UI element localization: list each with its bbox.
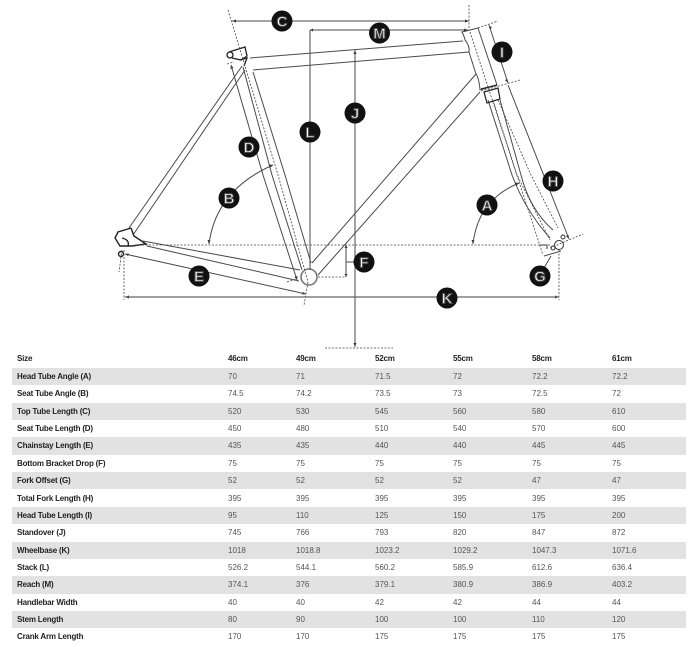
row: head tube length [12, 507, 686, 524]
row: reach [12, 576, 686, 594]
row: handlebar width: 40 [296, 598, 305, 607]
row: standover: 745 [228, 528, 241, 537]
fork dropout [540, 235, 565, 250]
row: top tube length: Top Tube Length (C) [17, 407, 90, 416]
dimension D: D [244, 140, 255, 156]
row: chainstay length: 435 [228, 441, 241, 450]
row: stem length: 90 [296, 615, 305, 624]
row: stack: 585.9 [453, 563, 473, 572]
row: fork offset [12, 472, 686, 489]
row: wheelbase: 1018.8 [296, 546, 320, 554]
rear dropout [115, 228, 146, 256]
dimension H [508, 85, 569, 239]
row: wheelbase: 1029.2 [453, 546, 477, 554]
row: seat tube angle: 72.5 [532, 389, 548, 398]
row: head tube length: 175 [532, 511, 545, 520]
dimension F: F [359, 254, 369, 272]
row: total fork length: 395 [228, 494, 241, 502]
row: reach: 379.1 [375, 580, 395, 589]
row: stack: 544.1 [296, 563, 316, 572]
row: wheelbase: Wheelbase (K) [17, 546, 70, 554]
row: handlebar width: 44 [612, 598, 621, 607]
table header: 46cm [228, 354, 248, 363]
dimension M [310, 22, 468, 44]
row: seat tube length [17, 424, 625, 433]
row: chainstay length: 445 [532, 441, 545, 450]
row: total fork length: 395 [375, 494, 388, 502]
row: chainstay length: 445 [612, 441, 625, 450]
row: stack: 636.4 [612, 563, 632, 572]
angle A: A [482, 198, 493, 214]
row: wheelbase: 1023.2 [375, 546, 399, 554]
row: seat tube angle: 73 [453, 389, 462, 398]
row: seat tube length: 540 [453, 424, 466, 433]
table header: 49cm [296, 354, 316, 363]
row: seat tube length: 570 [532, 424, 545, 433]
row: top tube length: 560 [453, 407, 466, 416]
seat clamp [227, 47, 247, 66]
row: reach: Reach (M) [17, 580, 53, 589]
row: stem length: 80 [228, 615, 237, 624]
row: bottom bracket drop: 75 [228, 459, 237, 468]
row: bottom bracket drop: 75 [296, 459, 305, 468]
row: handlebar width: 44 [532, 598, 541, 607]
row: bottom bracket drop [17, 459, 621, 468]
row: standover [17, 528, 625, 537]
row: seat tube length: 480 [296, 424, 309, 433]
row: top tube length: 580 [532, 407, 545, 416]
row: handlebar width: 42 [375, 598, 384, 607]
row: seat tube angle: Seat Tube Angle (B) [17, 389, 88, 398]
row: chainstay length: 435 [296, 441, 309, 450]
row: crank arm length [17, 632, 625, 641]
row: top tube length: 530 [296, 407, 309, 416]
head tube [462, 28, 497, 90]
row: head tube length: 110 [296, 511, 309, 520]
fork [481, 85, 553, 238]
row: head tube length: 95 [228, 511, 237, 520]
row: seat tube length: 600 [612, 424, 625, 433]
row: fork offset: 52 [296, 476, 305, 485]
row: total fork length: 395 [453, 494, 466, 502]
row: bottom bracket drop: 75 [612, 459, 621, 468]
row: reach: 374.1 [228, 580, 248, 589]
row: wheelbase: 1018 [228, 546, 246, 554]
row: standover: 766 [296, 528, 309, 537]
row: chainstay length: 440 [375, 441, 388, 450]
geometry table [12, 354, 686, 641]
row: bottom bracket drop: 75 [532, 459, 541, 468]
row: seat tube angle [17, 389, 621, 398]
table header: Size [17, 354, 32, 363]
row: head tube angle: Head Tube Angle (A) [17, 372, 91, 381]
row: bottom bracket drop: 75 [453, 459, 462, 468]
row: crank arm length: 175 [375, 632, 388, 641]
row: seat tube angle: 73.5 [375, 389, 391, 398]
row: handlebar width: Handlebar Width [17, 598, 78, 607]
dimension E [125, 254, 306, 294]
row: seat tube length: 450 [228, 424, 241, 433]
row: chainstay length: Chainstay Length (E) [17, 441, 93, 450]
dimension C: C [277, 14, 288, 30]
row: head tube angle: 72.2 [532, 372, 548, 381]
chainstay [143, 241, 300, 281]
table header: 61cm [612, 354, 632, 363]
row: fork offset: 52 [228, 476, 237, 485]
row: seat tube length: 510 [375, 424, 388, 433]
row: handlebar width: 40 [228, 598, 237, 607]
seat stay [129, 66, 245, 235]
row: standover: 820 [453, 528, 466, 537]
row: seat tube angle: 74.5 [228, 389, 244, 398]
row: stem length [12, 611, 686, 628]
dimension F [346, 245, 374, 277]
dimension I: I [500, 44, 504, 62]
arrowheads [125, 20, 569, 347]
row: head tube angle: 70 [228, 372, 237, 381]
dimension K: K [442, 290, 453, 308]
row: standover: 872 [612, 528, 625, 537]
row: fork offset: 47 [612, 476, 621, 485]
row: stack: 526.2 [228, 563, 248, 572]
top tube [250, 41, 469, 70]
row: chainstay length: 440 [453, 441, 466, 450]
dimension E: E [194, 268, 204, 286]
row: reach: 376 [296, 580, 309, 589]
row: fork offset: Fork Offset (G) [17, 476, 70, 485]
row: top tube length: 545 [375, 407, 388, 416]
row: standover: 793 [375, 528, 388, 537]
row: head tube length: 125 [375, 511, 388, 520]
row: head tube angle: 72.2 [612, 372, 628, 381]
row: fork offset: 52 [375, 476, 384, 485]
row: stem length: 100 [375, 615, 388, 624]
row: crank arm length: 170 [228, 632, 241, 641]
row: stem length: 120 [612, 615, 625, 624]
row: total fork length: 395 [612, 494, 625, 502]
row: top tube length [12, 403, 686, 420]
row: seat tube length: Seat Tube Length (D) [17, 424, 93, 433]
row: handlebar width [17, 598, 621, 607]
row: crank arm length: 175 [453, 632, 466, 641]
row: stack: 560.2 [375, 563, 395, 572]
table header: 58cm [532, 354, 552, 363]
row: head tube angle [12, 368, 686, 385]
row: head tube angle: 71.5 [375, 372, 391, 381]
dimension L [300, 30, 320, 270]
down tube [312, 74, 480, 275]
row: head tube angle: 72 [453, 372, 462, 381]
dimension K [125, 288, 559, 308]
dimension G [530, 251, 561, 286]
dimension H: H [548, 174, 558, 190]
dimension L: L [305, 124, 315, 142]
row: head tube angle: 71 [296, 372, 305, 381]
row: standover: Standover (J) [17, 528, 66, 537]
row: reach: 380.9 [453, 580, 473, 589]
row: seat tube angle: 72 [612, 389, 621, 398]
dashed reference lines [119, 5, 583, 348]
angle B: B [224, 190, 235, 208]
row: stem length: 110 [532, 615, 545, 624]
row: total fork length: 395 [532, 494, 545, 502]
row: standover: 847 [532, 528, 545, 537]
row: crank arm length: Crank Arm Length [17, 632, 83, 641]
row: stack: 612.6 [532, 563, 552, 572]
row: crank arm length: 175 [532, 632, 545, 641]
angle B [209, 165, 273, 244]
row: reach: 386.9 [532, 580, 552, 589]
dimension D [231, 65, 297, 280]
row: fork offset: 52 [453, 476, 462, 485]
row: chainstay length [12, 437, 686, 455]
row: head tube length: 150 [453, 511, 466, 520]
row: top tube length: 520 [228, 407, 241, 416]
seat tube [243, 67, 311, 270]
row: total fork length [17, 494, 625, 502]
row: crank arm length: 170 [296, 632, 309, 641]
row: head tube length: 200 [612, 511, 625, 520]
row: bottom bracket drop: 75 [375, 459, 384, 468]
dimension G: G [534, 268, 546, 286]
dimension M: M [373, 26, 386, 42]
row: stack: Stack (L) [17, 563, 49, 572]
row: wheelbase: 1047.3 [532, 546, 556, 554]
row: handlebar width: 42 [453, 598, 462, 607]
row: total fork length: Total Fork Length (H) [17, 494, 93, 502]
row: seat tube angle: 74.2 [296, 389, 312, 398]
table header: 55cm [453, 354, 473, 363]
row: bottom bracket drop: Bottom Bracket Drop (F) [17, 459, 105, 468]
row: wheelbase [12, 542, 686, 559]
row: fork offset: 47 [532, 476, 541, 485]
row: top tube length: 610 [612, 407, 625, 416]
row: head tube length: Head Tube Length (I) [17, 511, 92, 520]
dimension I [489, 25, 512, 83]
row: crank arm length: 175 [612, 632, 625, 641]
row: wheelbase: 1071.6 [612, 546, 636, 554]
table header: 52cm [375, 354, 395, 363]
row: stem length: 100 [453, 615, 466, 624]
dimension C [232, 10, 469, 32]
row: reach: 403.2 [612, 580, 632, 589]
row: stack [17, 563, 632, 572]
table header [17, 354, 632, 363]
bottom bracket [301, 269, 317, 285]
dimension J [344, 50, 366, 347]
bike frame geometry diagram [114, 5, 584, 348]
dimension J: J [351, 106, 359, 122]
angle A [473, 183, 519, 244]
row: stem length: Stem Length [17, 615, 63, 624]
row: total fork length: 395 [296, 494, 309, 502]
